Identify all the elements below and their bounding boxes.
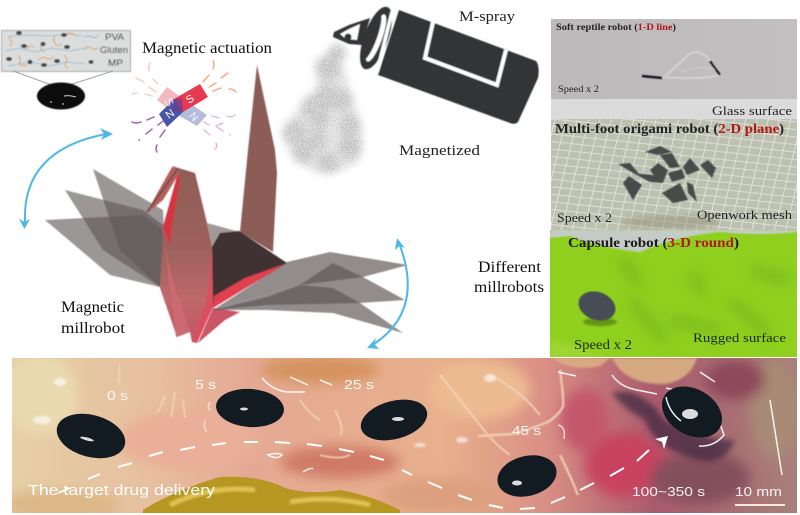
caption: target drug delivery: The target drug delivery: [28, 482, 216, 499]
gold food residue: [143, 477, 400, 513]
neck and body: [160, 166, 213, 343]
heading: magnetic actuation: Magnetic actuation: [142, 40, 272, 57]
panel: multi-foot origami robot: Speed x 2: [557, 210, 612, 225]
icon: crossed magnets: N: [164, 107, 177, 122]
back: [212, 231, 287, 307]
label: magnetic millrobot: Magnetic: [61, 299, 124, 316]
fold highlights: [55, 365, 578, 495]
label: M-spray: M-spray: [459, 9, 516, 25]
label: magnetized: Magnetized: [399, 143, 481, 159]
scale bar: [735, 504, 785, 506]
label: magnetic millrobot: [61, 299, 126, 337]
beak: [145, 167, 180, 215]
material composition inset: [2, 30, 130, 72]
time labels: 10 mm: [735, 484, 782, 499]
robot trace: [642, 52, 720, 78]
panel: soft reptile robot: Glass surface: [712, 103, 792, 118]
capsule robot: [574, 286, 620, 326]
icon: crossed magnets: N: [186, 110, 200, 124]
right wings: [213, 252, 408, 333]
arrow: left wing rotation: [19, 128, 113, 229]
panel: multi-foot origami robot: [551, 119, 797, 230]
label: magnetic millrobot: millrobot: [61, 320, 126, 337]
panel: capsule robot: Capsule robot ( 3-D round ): [568, 235, 739, 250]
dashed delivery path: [58, 442, 649, 509]
panel: soft reptile robot: Soft reptile robot ( 1-D line ): [556, 22, 676, 32]
time labels: 45 s: [512, 423, 542, 438]
time labels: 0 s: [107, 388, 129, 403]
icon: crossed magnets: S: [162, 96, 176, 109]
arrowhead: [655, 436, 668, 449]
stain: [612, 392, 735, 461]
label: different millrobots: millrobots: [474, 279, 544, 296]
spray particles: [282, 44, 363, 174]
magnetic droplet: [13, 71, 113, 110]
icon: crossed magnets: S: [184, 93, 197, 107]
panel: multi-foot origami robot: Multi-foot origami robot ( 2-D plane ): [555, 121, 784, 136]
panel: capsule robot: [550, 230, 797, 357]
origami robot: [618, 146, 716, 203]
panel: target drug delivery photo: [0, 355, 800, 515]
panel: capsule robot: Speed x 2: [574, 337, 632, 352]
material composition inset: Gluten: [100, 45, 128, 55]
panel: multi-foot origami robot: Openwork mesh: [697, 207, 793, 222]
label: different millrobots: Different: [478, 259, 542, 276]
folded tissue lumps: [552, 358, 697, 384]
panel: soft reptile robot: Speed x 2: [558, 85, 599, 95]
time labels: 5 s: [195, 377, 217, 392]
time labels: [107, 377, 782, 499]
time labels: 25 s: [344, 377, 375, 392]
inset legend: PVA: [105, 32, 124, 42]
icon: crossed magnets: [132, 61, 236, 152]
specular highlights: [33, 374, 496, 447]
capsule positions: [56, 386, 722, 497]
arrow: right wing rotation: [367, 238, 408, 349]
icon: spray can: [333, 3, 539, 124]
material composition inset: MP: [108, 58, 123, 68]
label: different millrobots: [474, 259, 544, 296]
panel: capsule robot: Rugged surface: [693, 330, 786, 345]
time labels: 100~350 s: [632, 484, 706, 499]
origami crane millrobot: [45, 65, 408, 343]
panel: soft reptile robot: [551, 19, 797, 119]
tissue texture: [0, 355, 800, 515]
left wings: [45, 169, 167, 287]
tail: [240, 65, 277, 252]
